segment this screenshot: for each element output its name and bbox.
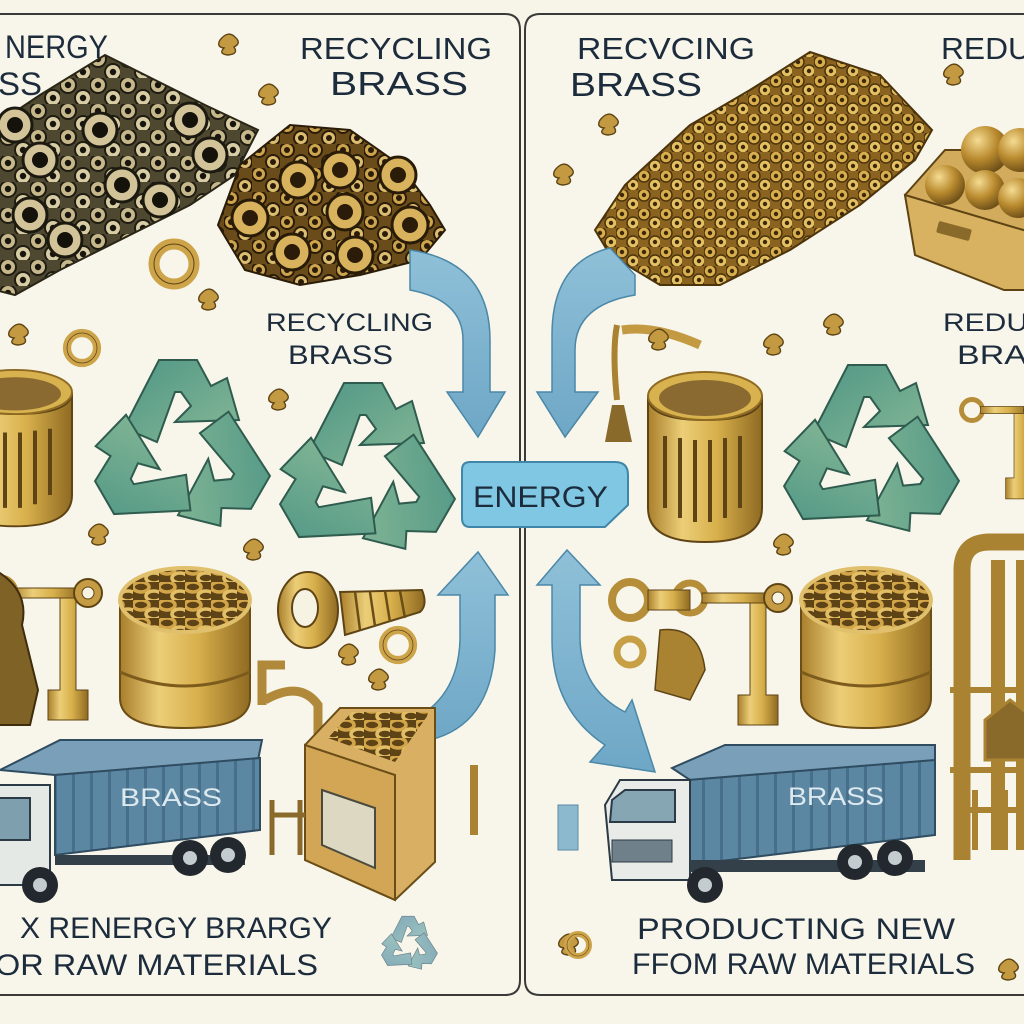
- truck right: [605, 745, 935, 903]
- center recycling brass label: BRASS: [288, 340, 393, 370]
- left heading: recycling brass: [300, 31, 492, 102]
- truck left: [0, 740, 262, 903]
- right label: reduced brass: REDU: [943, 309, 1024, 337]
- tub left: [120, 568, 250, 728]
- valve upper right: [962, 400, 1024, 499]
- barrel left: [0, 370, 72, 526]
- pipe connector: [262, 665, 318, 735]
- scrap bin: [272, 708, 435, 900]
- icon: top arrow right panel: [537, 248, 635, 437]
- icon: recycling symbol 1: [74, 360, 287, 545]
- left heading: energy brass: NERGY: [5, 29, 108, 65]
- center recycling brass label: RECYCLING: [266, 309, 433, 337]
- icon: bottom arrow left panel: [408, 552, 508, 740]
- right caption: FFOM RAW MATERIALS: [632, 948, 975, 981]
- factory pipes: [950, 542, 1024, 860]
- tub right: [801, 568, 931, 728]
- brass figure left: [0, 570, 38, 725]
- washer small left: [67, 333, 97, 363]
- energy label: [462, 462, 628, 527]
- left caption: [0, 912, 332, 982]
- left heading: energy brass: [0, 29, 108, 102]
- washer left: [154, 244, 194, 284]
- right heading: recycling brass: BRASS: [570, 66, 702, 103]
- truck right: BRASS: [788, 783, 884, 811]
- small brass post: [470, 765, 478, 835]
- icon: recycling symbol 3: [763, 365, 976, 550]
- right heading: recycling brass: RECVCING: [577, 31, 755, 66]
- energy label: ENERGY: [473, 481, 608, 514]
- panel: recycling brass (left): [0, 14, 520, 995]
- icon: bottom arrow right panel: [537, 550, 655, 772]
- brush: [605, 325, 700, 442]
- left caption: OR RAW MATERIALS: [0, 949, 318, 982]
- left caption: X RENERGY BRARGY: [20, 912, 332, 945]
- left heading: recycling brass: BRASS: [330, 65, 468, 102]
- center recycling brass label: [266, 309, 433, 370]
- washer center: [383, 630, 413, 660]
- right label: reduced brass: BRA: [957, 340, 1024, 370]
- icon: top arrow left panel: [410, 250, 505, 437]
- small tag icon: [558, 805, 578, 850]
- small washer bottom: [567, 934, 589, 956]
- scrap pile: brown rings: [218, 125, 445, 285]
- left heading: recycling brass: RECYCLING: [300, 31, 492, 66]
- scrap pile: dark rings: [0, 55, 258, 295]
- valve right: [612, 582, 792, 725]
- scrap pile: gold rings: [595, 52, 932, 285]
- icon: small recycle outline: [375, 916, 443, 975]
- bolt: [278, 572, 425, 648]
- valve left: [0, 578, 102, 720]
- crate with brass balls: [905, 126, 1024, 290]
- right heading: recycling brass: [570, 31, 755, 103]
- right caption: [632, 913, 975, 981]
- barrel right: [648, 372, 762, 542]
- icon: recycling symbol 2: [259, 383, 472, 568]
- truck left: BRASS: [120, 784, 222, 812]
- right caption: PRODUCTING NEW: [637, 913, 956, 946]
- panel: raw materials (right): [525, 14, 1024, 995]
- right label: reduced brass: [943, 309, 1024, 370]
